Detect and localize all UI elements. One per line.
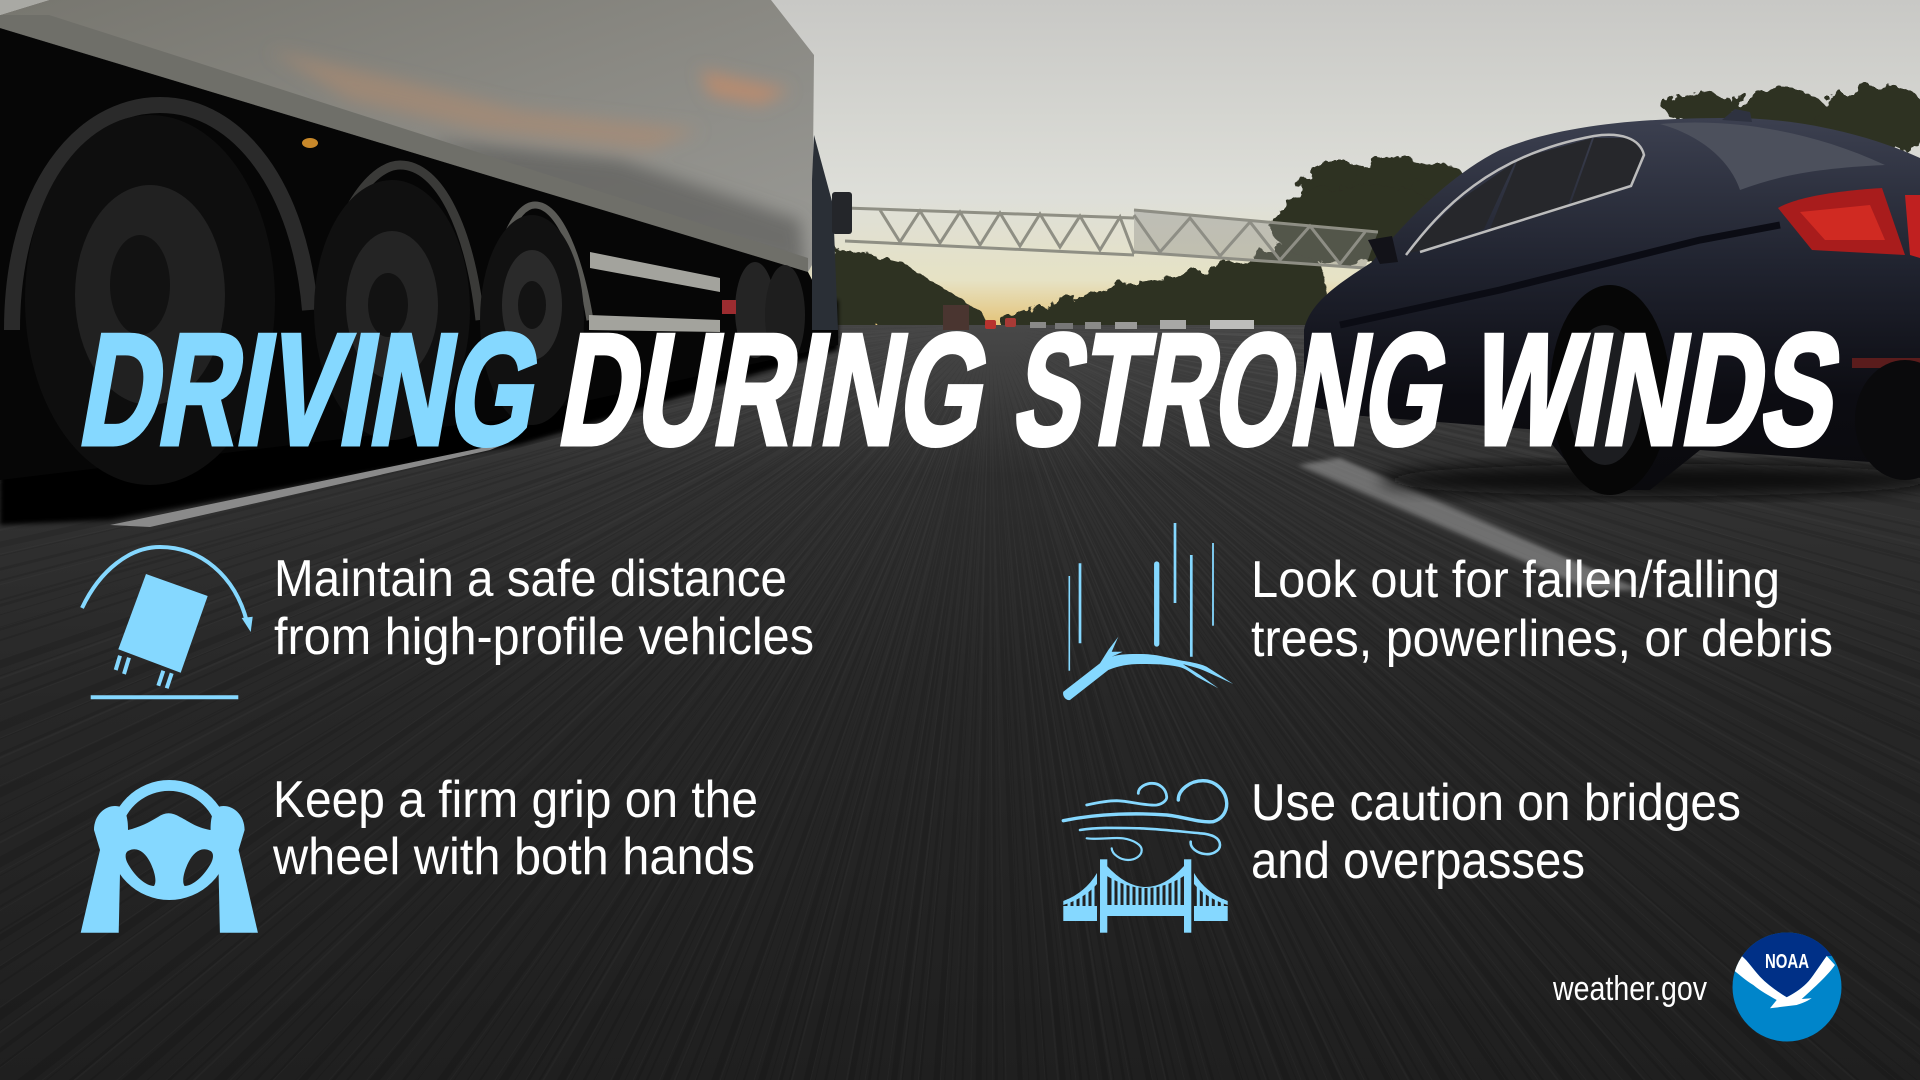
- icon: hands on steering wheel: [81, 780, 258, 933]
- truck shadow under chassis: [0, 300, 838, 525]
- wind gusts: [1063, 781, 1227, 860]
- title: [70, 301, 1854, 478]
- truck trailer body: [0, 0, 814, 272]
- text: firm grip: [272, 771, 758, 886]
- text: firm grip: wheel with both hands: [272, 828, 755, 886]
- truck band: [0, 15, 808, 272]
- marker light: [302, 138, 318, 148]
- truck chassis: [0, 28, 838, 480]
- car window trim: [1406, 135, 1644, 255]
- icon: wind over bridge: [1063, 781, 1228, 933]
- text: bridges: Use caution on bridges: [1251, 774, 1741, 832]
- truck side skirt: [589, 252, 736, 332]
- car side mirror: [1368, 236, 1398, 264]
- title word: during: DURING: [549, 301, 1003, 478]
- icon: tipping truck: [82, 547, 253, 697]
- truck cab: [812, 135, 838, 330]
- logo: NOAA: [1732, 932, 1842, 1042]
- overhead gantry: [845, 208, 1378, 268]
- car door crease: [1340, 225, 1780, 325]
- road surface: [0, 325, 1920, 1080]
- text: maintain distance: [274, 550, 814, 666]
- truck top-left panel: [0, 0, 49, 15]
- icon: falling branch and debris: [1063, 523, 1233, 700]
- text: fallen trees: Look out for fallen/falling: [1251, 551, 1780, 609]
- road motion streaks: [290, 0, 1690, 1025]
- text: fallen trees: trees, powerlines, or debris: [1251, 610, 1833, 668]
- car lower lamp: [1852, 358, 1920, 368]
- text: bridges: and overpasses: [1251, 832, 1585, 890]
- car: [1304, 109, 1920, 496]
- bridge: [1063, 859, 1228, 933]
- text: bridges: [1251, 774, 1741, 890]
- truck wheels: [12, 105, 805, 485]
- gantry panel shading: [1134, 210, 1378, 268]
- background: highway photo scene: [0, 0, 1920, 794]
- car rear deck highlight: [1660, 123, 1885, 190]
- car wheels: [1550, 285, 1670, 495]
- car roof fin: [1722, 109, 1752, 122]
- text: firm grip: Keep a firm grip on the: [273, 771, 758, 829]
- text: maintain distance: from high-profile vehicles: [274, 608, 814, 666]
- truck cloud reflections: [270, 50, 806, 270]
- car taillight right: [1905, 195, 1920, 258]
- text: maintain distance: Maintain a safe distance: [274, 550, 787, 608]
- car body: [1304, 118, 1920, 490]
- car taillight glow: [1800, 205, 1885, 240]
- lane marking left: [110, 442, 510, 527]
- car windows: [1406, 138, 1643, 253]
- distant traffic: [943, 305, 1254, 330]
- sky: [0, 0, 1920, 330]
- text: fallen trees: [1251, 551, 1833, 668]
- distant trees: [830, 86, 1920, 330]
- title word: driving: DRIVING: [70, 301, 554, 478]
- car wheel shadow: [1380, 464, 1920, 496]
- title word: strong: STRONG: [1004, 301, 1462, 478]
- lane marking right: [1298, 458, 1640, 590]
- logo: NOAA: NOAA: [1765, 951, 1809, 973]
- car taillight: [1778, 188, 1905, 255]
- truck mirror: [832, 192, 852, 234]
- text: weather.gov: weather.gov: [1552, 970, 1707, 1008]
